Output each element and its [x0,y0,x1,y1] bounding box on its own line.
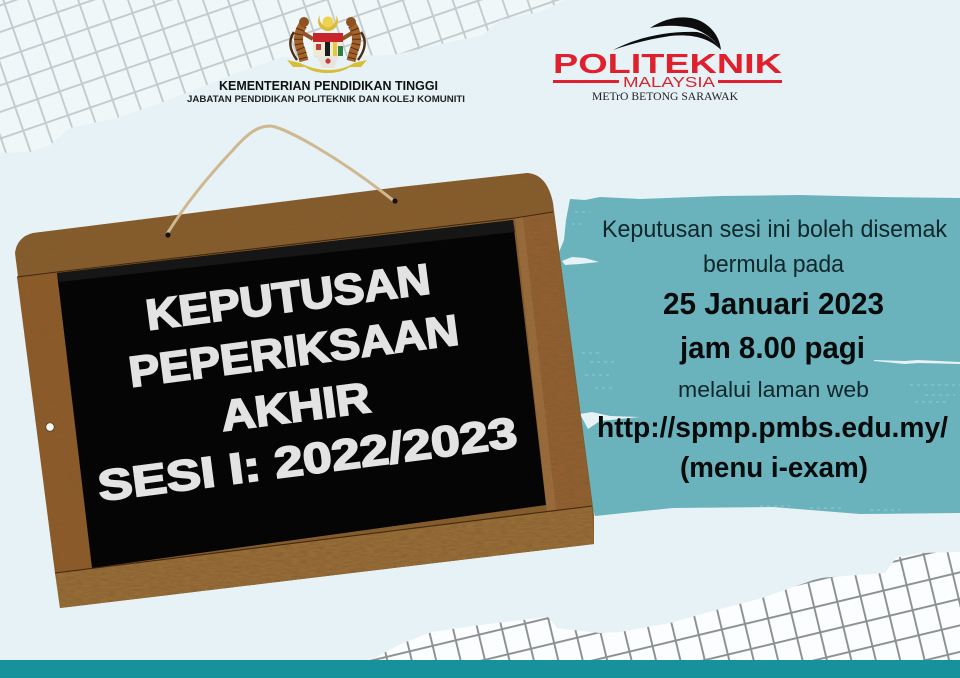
rail joints [17,212,592,573]
malaysia: MALAYSIA [623,74,715,91]
tiger stripes [351,25,356,61]
text: time: jam 8.00 pagi [679,330,865,365]
board title line 1: KEPUTUSAN [143,255,433,340]
brush speckles [572,212,960,510]
right tiger [342,17,365,61]
right string hole [392,198,398,204]
board title line 4: SESI I: 2022/2023 [95,409,520,511]
wordmark: POLITEKNIK [553,48,782,79]
logo: Politeknik Malaysia [553,17,782,103]
text: url: http://spmp.pmbs.edu.my/ [597,412,948,444]
tiger tail [290,32,297,60]
department name: JABATAN PENDIDIKAN POLITEKNIK DAN KOLEJ KOMUNITI [187,94,465,104]
tiger stripes [299,25,304,61]
tiger foreleg [342,33,352,39]
text: results can be checked from: Keputusan sesi ini boleh disemak [602,216,948,243]
tiger body [299,25,304,61]
left rail [17,272,92,573]
black slate [57,220,546,568]
slate top smudge [57,220,515,282]
red rule right [718,80,782,83]
ministry name: KEMENTERIAN PENDIDIKAN TINGGI [219,79,438,93]
tiger head [299,17,309,27]
text: starting on: bermula pada [703,251,845,278]
bottom rail [55,506,594,608]
shield yellow panel [333,42,337,57]
shield middle panels [313,42,343,56]
shield green palm [338,46,343,56]
black swoosh [613,17,721,50]
bottom teal band [0,660,960,678]
hanging string [167,126,394,234]
text: via website: melalui laman web [678,377,869,402]
tiger head [346,17,356,27]
star [322,16,334,28]
torn grid paper: top left [0,0,570,155]
left tiger [290,17,313,61]
brush stroke shape [555,195,960,516]
right rail [515,212,592,511]
board title line 2: PEPERIKSAAN [126,307,462,397]
red rule left [553,80,619,83]
shield base mark [325,58,331,64]
crescent [318,15,338,31]
shield red motif [316,44,321,50]
panel: teal brush stroke with results information [555,195,960,516]
chalkboard [15,126,594,608]
right rail inner strip [515,217,556,511]
brush highlights [562,257,960,429]
shield top band [313,33,343,42]
left string hole [165,232,171,238]
text: date: 25 Januari 2023 [663,286,884,321]
torn grid paper: bottom right [370,550,960,660]
board title line 3: AKHIR [218,374,373,441]
tiger body [351,25,356,61]
tiger tail [358,32,365,60]
logo: Malaysian coat of arms [287,15,367,73]
campus name: METrO BETONG SARAWAK [592,91,739,103]
tiger foreleg [303,33,313,39]
text: menu: (menu i-exam) [680,452,868,484]
shield black panel [325,42,330,57]
side hole [46,423,54,431]
shield base [317,56,339,68]
motto ribbon [287,60,367,73]
wooden frame [15,173,594,608]
